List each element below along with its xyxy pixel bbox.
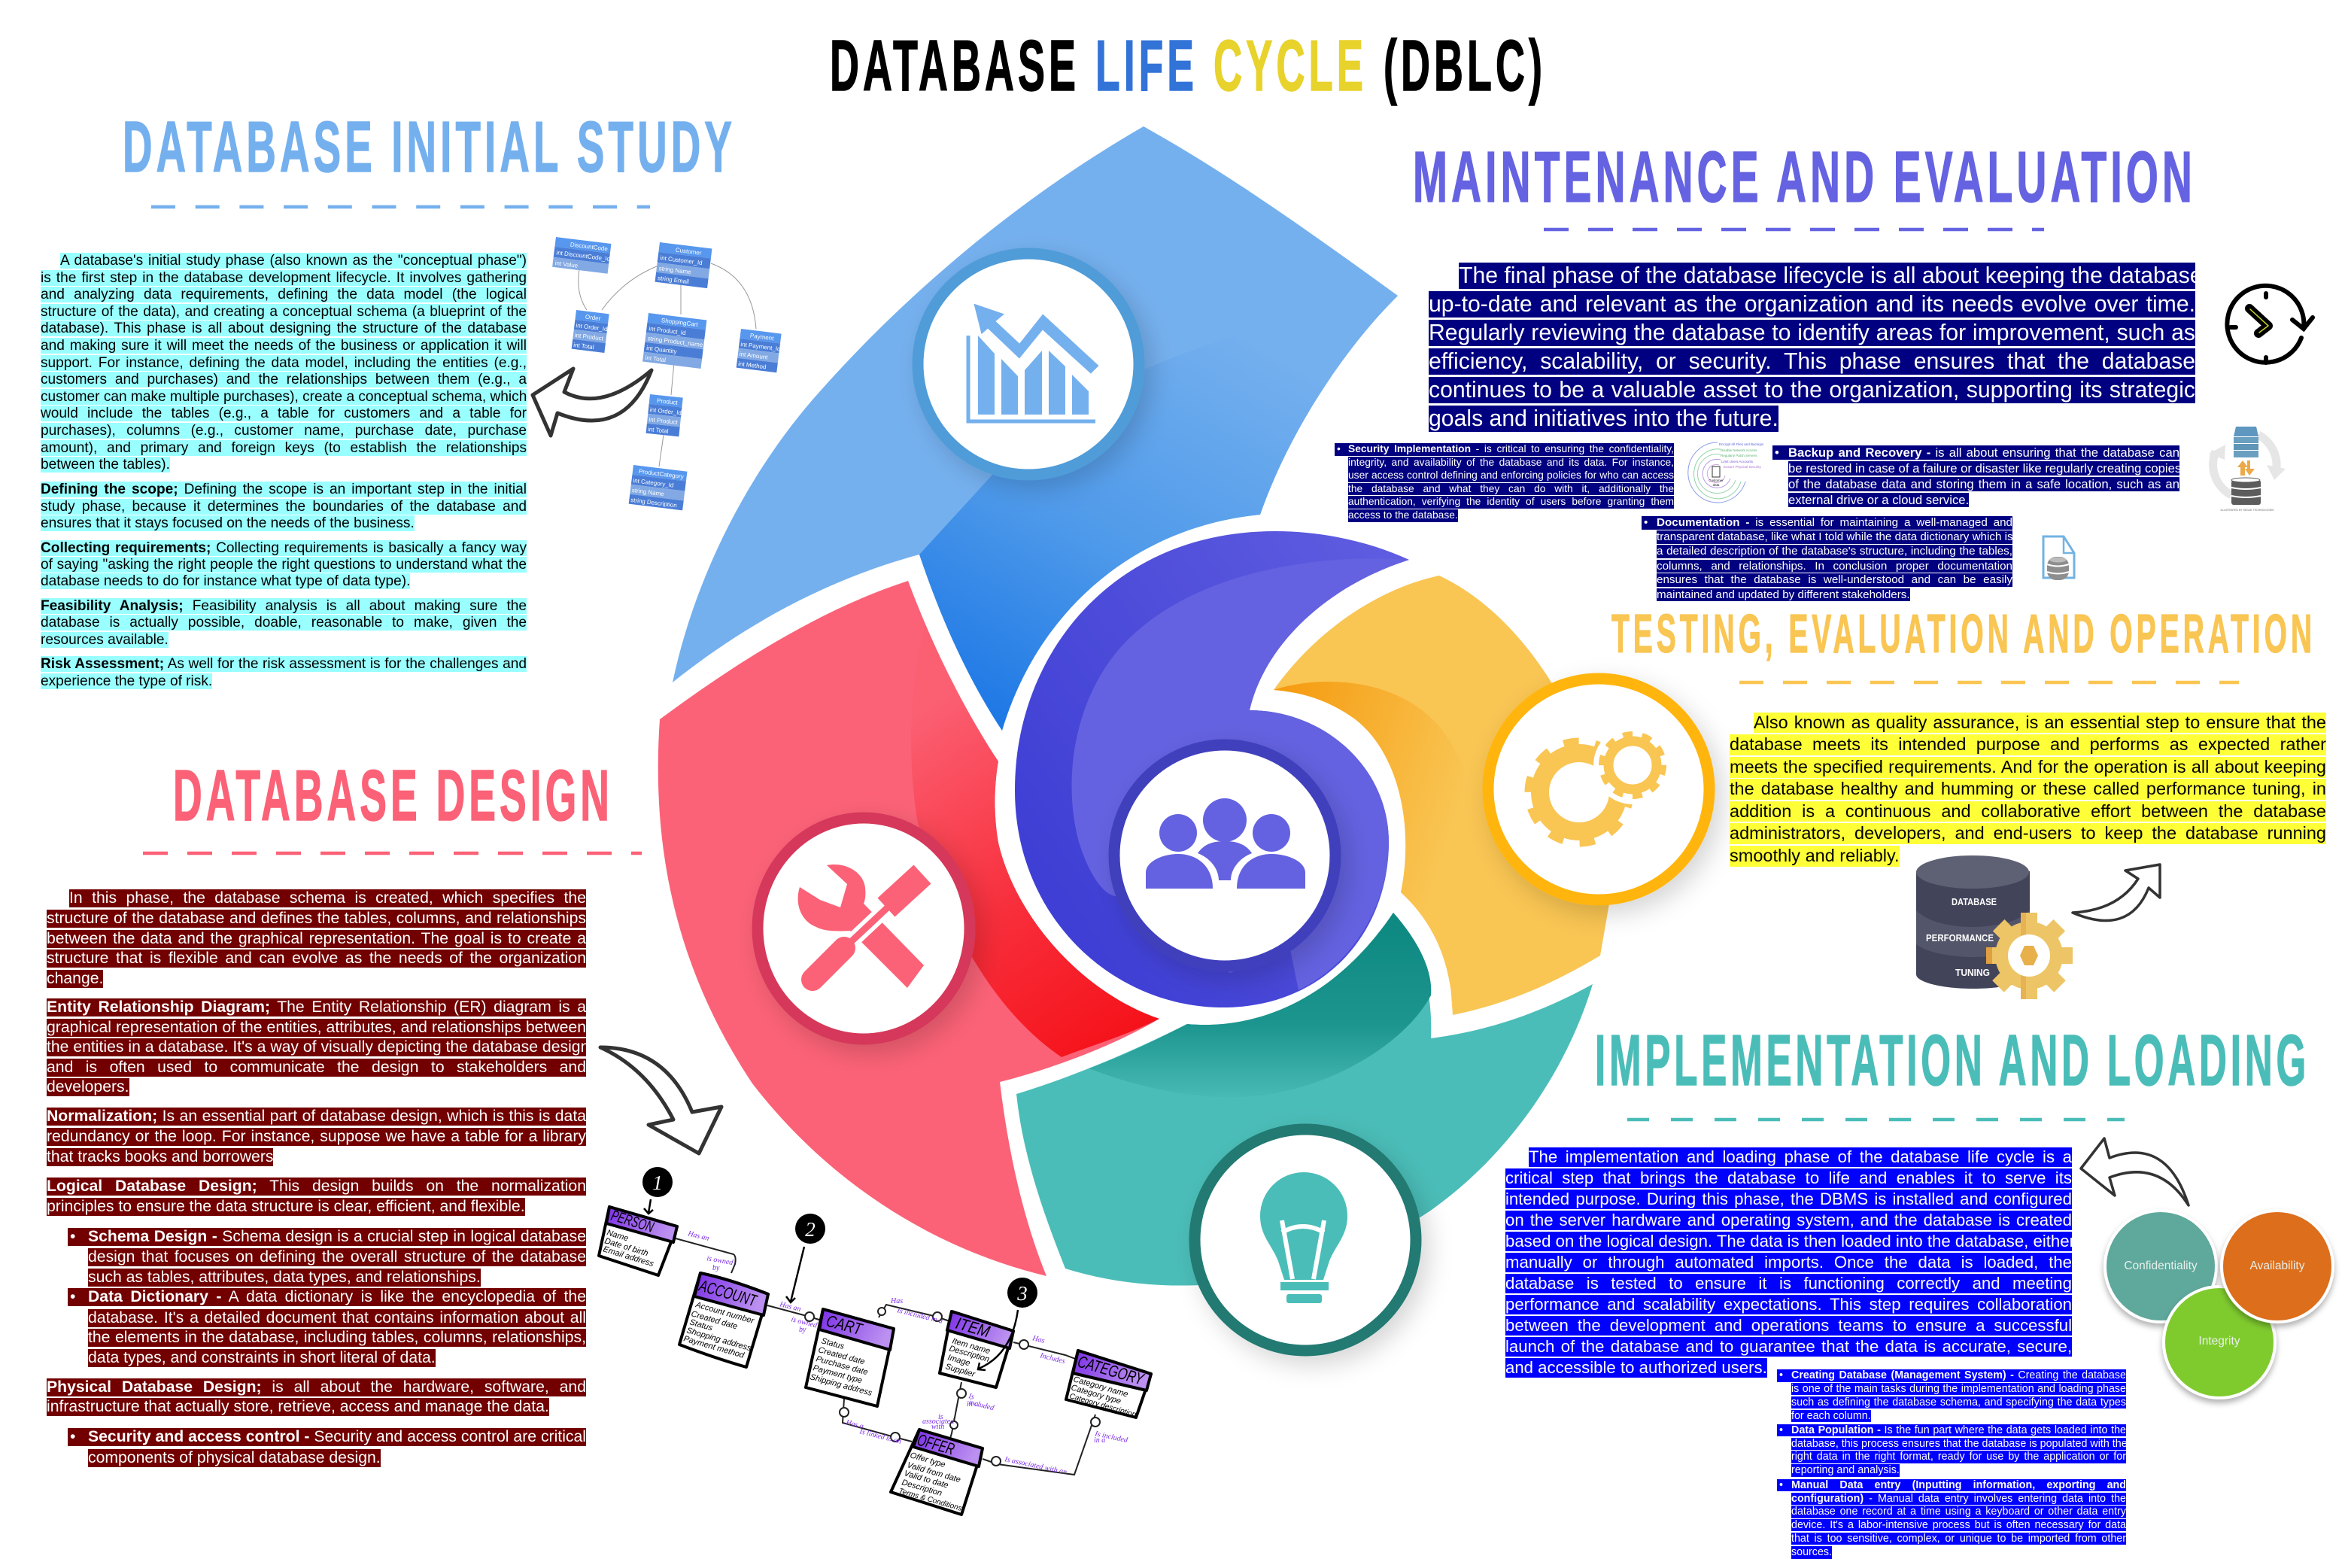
- text panel: implementation details list: configuration) - Manual data entry involves entering data into the: [1791, 1493, 2126, 1505]
- text panel: documentation: [1642, 516, 2013, 601]
- ER diagram: blue schema tables: int Product: [649, 416, 679, 426]
- ER diagram: hand drawn entities: Shipping address: [809, 1372, 873, 1398]
- CIA triad venn diagram: Availability: [2250, 1260, 2305, 1272]
- arrow: from design text to ER diagram: [600, 1047, 721, 1153]
- text panel: implementation and loading: intended purpose. During this phase, the DBMS is installed and configured: [1505, 1190, 2072, 1208]
- ER diagram: hand drawn entities: PERSON: [609, 1208, 656, 1236]
- text panel: security implementation: the database and what they can do with it, additionally the: [1348, 483, 1674, 494]
- text panel: backup and recovery: •: [1775, 445, 1779, 460]
- text panel: maintenance and evaluation: continues to be a valuable asset to the organization, supporting its strategic: [1429, 378, 2195, 402]
- ER diagram: blue schema tables: int Quantity: [646, 345, 677, 355]
- text panel: testing, evaluation and operation: meets the specified requirements. And for the operation is all about keeping: [1730, 757, 2326, 776]
- ER diagram: blue schema tables: int Category_Id: [633, 477, 674, 489]
- icon: database performance tuning: PERFORMANCE: [1926, 932, 1994, 944]
- ER diagram: hand drawn entities: Includes: [1038, 1351, 1066, 1366]
- text panel: implementation and loading: The implementation and loading phase of the database life cycle is a: [1529, 1147, 2072, 1166]
- text panel: database initial study: [41, 253, 527, 689]
- ER diagram: hand drawn entities: included: [967, 1398, 995, 1412]
- ER diagram: hand drawn entities: Supplier: [944, 1362, 977, 1379]
- text panel: database initial study: is the first step in the database development lifecycle. It involves gathering: [41, 270, 527, 286]
- text panel: implementation and loading: and accessible to authorized users.: [1505, 1358, 1767, 1377]
- icon: security spiral: Ensure Physical Security: [1724, 465, 1762, 469]
- ER diagram: hand drawn entities: in a: [1094, 1436, 1105, 1445]
- text panel: implementation details list: sources.: [1791, 1546, 1832, 1558]
- swirl segment: blue initial study: [673, 126, 1398, 731]
- text panel: testing, evaluation and operation: [1730, 712, 2326, 867]
- text panel: database design: [47, 889, 589, 1467]
- ER diagram: hand drawn entities: CATEGORY: [1076, 1352, 1147, 1389]
- ER diagram: blue schema tables: string Name: [631, 487, 665, 497]
- ER diagram: hand drawn entities: Is included: [1093, 1430, 1129, 1445]
- text panel: maintenance and evaluation: goals and initiatives into the future.: [1429, 406, 1778, 431]
- text panel: database initial study: Feasibility Analysis; Feasibility analysis is all about making sure the: [41, 597, 527, 614]
- text panel: testing, evaluation and operation: database meets its intended purpose and performs as expected rather: [1730, 734, 2326, 754]
- text panel: security implementation: authentication, verifying the identity of users before granting them: [1348, 496, 1674, 507]
- ER diagram: hand drawn entities: Has: [890, 1297, 903, 1305]
- ER diagram: hand drawn entities: Category type: [1070, 1383, 1122, 1406]
- ER diagram: hand drawn entities: Date of birth: [603, 1236, 649, 1258]
- text panel: implementation details list: •: [1779, 1369, 1783, 1381]
- text panel: database initial study: purchases), columns (e.g., customer name, purchase date, purchase: [41, 423, 527, 439]
- text panel: security implementation: user access control defining and enforcing policies for who can access: [1348, 469, 1674, 481]
- text panel: implementation and loading: based on the logical design. The data is then loaded into the database, either: [1505, 1232, 2075, 1250]
- icon: security spiral: Disable Network Access: [1721, 448, 1757, 452]
- text panel: implementation and loading: manually or through automated imports. Once the data is loaded, the: [1505, 1253, 2072, 1272]
- icon: backup and recovery: [2209, 427, 2286, 512]
- icon: security spiral: Regularly Patch Servers: [1721, 454, 1757, 457]
- ER diagram: blue schema tables: [552, 237, 782, 510]
- icon: security spiral: [1688, 442, 1764, 503]
- text panel: database design: that tracks books and borrowers: [47, 1148, 273, 1165]
- text panel: backup and recovery: be restored in case of a failure or disaster like regularly creating copies: [1788, 461, 2181, 476]
- CIA triad venn diagram: [2105, 1211, 2333, 1398]
- ER diagram: hand drawn entities: Account number: [694, 1300, 756, 1326]
- text panel: documentation: maintained and updated by different stakeholders.: [1657, 588, 1910, 601]
- text panel: implementation details list: database, this process ensures that the database is populated with the: [1791, 1438, 2128, 1450]
- ER diagram: hand drawn entities: by: [712, 1264, 720, 1272]
- ER diagram: blue schema tables: Customer: [675, 247, 702, 257]
- ER diagram: hand drawn entities: in a: [967, 1400, 978, 1408]
- text panel: database design: graphical representation of the entities, attributes, and relationships between: [47, 1019, 586, 1036]
- heading: database initial study: DATABASE INITIAL STUDY: [123, 107, 736, 187]
- ER diagram: blue schema tables: Order: [585, 314, 601, 322]
- ER diagram: blue schema tables: string Email: [658, 275, 689, 285]
- icon: clock: [2227, 286, 2313, 363]
- text panel: database design: •: [70, 1428, 75, 1445]
- ER diagram: hand drawn entities: Payment type: [812, 1363, 863, 1385]
- ER diagram: hand drawn entities: is owned: [790, 1315, 819, 1330]
- ER diagram: hand drawn entities: 1: [652, 1171, 663, 1194]
- ER diagram: hand drawn entities: Is: [967, 1392, 975, 1402]
- icon: security spiral: data: [1713, 483, 1720, 487]
- text panel: database initial study: support. For instance, defining the data model, including the entities (e.g.,: [41, 355, 527, 371]
- ER diagram: hand drawn entities: Status: [688, 1317, 714, 1333]
- text panel: database design: developers.: [47, 1078, 129, 1095]
- ER diagram: blue schema tables: Payment: [749, 333, 775, 342]
- text panel: database design: Entity Relationship Diagram; The Entity Relationship (ER) diagram is a: [47, 998, 586, 1016]
- text panel: database design: •: [70, 1228, 75, 1245]
- ER diagram: hand drawn entities: 2: [805, 1218, 816, 1241]
- ER diagram: hand drawn entities: Created date: [690, 1309, 739, 1331]
- text panel: implementation details list: device. It's a labor-intensive process but is often necessary for data: [1791, 1519, 2126, 1531]
- text panel: database design: Data Dictionary - A data dictionary is like the encyclopedia of the: [88, 1288, 586, 1305]
- text panel: database design: data types, and constraints in short literal of data.: [88, 1349, 436, 1366]
- ER diagram: hand drawn entities: Image: [946, 1353, 971, 1368]
- text panel: security implementation: integrity, and availability of the database and its data. For instance,: [1348, 457, 1674, 468]
- text panel: maintenance and evaluation: Regularly reviewing the database to identify areas for improvement, such as: [1429, 321, 2195, 345]
- text panel: implementation details list: such as defining the database schema, and specifying the data types: [1791, 1396, 2126, 1408]
- ER diagram: hand drawn entities: ITEM: [954, 1314, 992, 1342]
- text panel: testing, evaluation and operation: smoothly and reliably.: [1730, 846, 1900, 865]
- text panel: implementation and loading: [1505, 1147, 2075, 1378]
- swirl segment: yellow testing: [1274, 576, 1609, 1015]
- ER diagram: blue schema tables: int Total: [573, 342, 594, 351]
- ER diagram: hand drawn entities: Created date: [817, 1345, 866, 1366]
- text panel: implementation details list: that is too sensitive, complex, or unique to be imported from other: [1791, 1532, 2126, 1544]
- text panel: database design: structure that is flexible and can evolve as the needs of the organization: [47, 950, 586, 967]
- text panel: database design: •: [70, 1288, 75, 1305]
- CIA triad venn diagram: Confidentiality: [2124, 1260, 2198, 1272]
- text panel: implementation details list: reporting and analysis.: [1791, 1464, 1900, 1476]
- heading: database design: DATABASE DESIGN: [173, 755, 613, 836]
- text panel: database initial study: database). This phase is all about designing the structure of the database: [41, 321, 527, 336]
- text panel: database initial study: between the tables).: [41, 457, 170, 473]
- text panel: database design: Schema Design - Schema design is a crucial step in logical database: [88, 1228, 586, 1245]
- text panel: database design: In this phase, the database schema is created, which specifies the: [69, 889, 586, 907]
- arrow: from schema to initial study text: [533, 369, 652, 436]
- ER diagram: hand drawn entities: Has an: [778, 1300, 802, 1314]
- text panel: database design: Normalization; Is an essential part of database design, which is this is data: [47, 1108, 586, 1125]
- text panel: database design: structure of the database and defines the tables, columns, and relationships: [47, 910, 586, 927]
- text panel: database initial study: structure of the data), and creating a conceptual schema (a blueprint of the: [41, 304, 527, 320]
- ER diagram: hand drawn entities: Has an: [686, 1229, 710, 1243]
- text panel: database initial study: resources available.: [41, 632, 169, 647]
- text panel: documentation: transparent database, like what I told while the data dictionary which is: [1657, 530, 2013, 543]
- text panel: implementation and loading: performance and scalability expectations. This step requires collaboration: [1505, 1295, 2072, 1314]
- text panel: implementation and loading: critical step that brings the database to life and enables it to serve its: [1505, 1168, 2072, 1187]
- text panel: database initial study: experience the type of risk.: [41, 673, 212, 689]
- ER diagram: blue schema tables: int Order_Id: [649, 406, 682, 416]
- icon: documentation file: [2043, 536, 2074, 580]
- text panel: testing, evaluation and operation: administrators, developers, and end-users to keep the database running: [1730, 823, 2326, 843]
- arrow: CIA triad to implementation text: [2081, 1138, 2189, 1205]
- text panel: documentation: a detailed description of the database's structure, including the tables,: [1657, 545, 2012, 558]
- ER diagram: hand drawn entities: Has: [1031, 1334, 1046, 1345]
- ER diagram: blue schema tables: string Name: [658, 265, 692, 275]
- ER diagram: hand drawn entities: Is linked to an: [858, 1427, 902, 1446]
- text panel: implementation and loading: on the server hardware and operating system, and the database is created: [1505, 1211, 2072, 1229]
- text panel: implementation details list: •: [1779, 1479, 1783, 1491]
- text panel: database initial study: database needs to do for instance what type of data type).: [41, 573, 410, 589]
- text panel: implementation and loading: between the development and operations teams to ensure a successful: [1505, 1316, 2072, 1335]
- text panel: database initial study: study phase, because it determines the boundaries of the database and: [41, 499, 527, 515]
- text panel: database initial study: would include the tables (e.g., a table for customers and a table for: [41, 406, 527, 421]
- text panel: implementation details list: Manual Data entry (Inputting information, exporting and: [1791, 1479, 2126, 1491]
- text panel: database initial study: database is actually possible, doable, reasonable to make, given the: [41, 615, 527, 631]
- ER diagram: hand drawn entities: is owned: [706, 1254, 734, 1267]
- ER diagram: hand drawn entities: Is associated with an: [1003, 1455, 1068, 1476]
- icon: security spiral: Customer: [1709, 479, 1724, 482]
- ER diagram: hand drawn entities: Purchase date: [815, 1354, 869, 1377]
- ER diagram: hand drawn entities: Status: [820, 1336, 846, 1351]
- ER diagram: hand drawn entities: Shopping address: [685, 1326, 752, 1353]
- text panel: implementation details list: [1777, 1369, 2128, 1559]
- text panel: database design: Physical Database Design; is all about the hardware, software, and: [47, 1378, 586, 1396]
- text panel: backup and recovery: Backup and Recovery - is all about ensuring that the database can: [1788, 445, 2179, 460]
- ER diagram: blue schema tables: int Customer_Id: [660, 254, 703, 266]
- text panel: database design: redundancy or the loop. For instance, suppose we have a table for a library: [47, 1128, 586, 1145]
- text panel: database initial study: Risk Assessment; As well for the risk assessment is for the challenges and: [41, 656, 527, 672]
- swirl segment: red database design: [658, 581, 1159, 1276]
- text panel: backup and recovery: of the database data and storing them in a safe location, such as an: [1788, 477, 2179, 491]
- ER diagram: blue schema tables: int DiscountCode_Id: [556, 249, 611, 263]
- text panel: testing, evaluation and operation: Also known as quality assurance, is an essential step to ensure that the: [1754, 712, 2326, 731]
- icon circle: light bulb: [1195, 1129, 1416, 1351]
- ER diagram: hand drawn entities: with: [931, 1423, 944, 1431]
- ER diagram: hand drawn entities: Payment method: [682, 1334, 746, 1360]
- text panel: database initial study: and analyzing data requirements, defining the data model (the logical: [41, 287, 527, 302]
- text panel: documentation: ensures that the database is well-understood and can be easily: [1657, 573, 2012, 586]
- text panel: database initial study: ensures that it stays focused on the needs of the business.: [41, 515, 415, 531]
- text panel: testing, evaluation and operation: addition is a continuous and collaborative effort between the database: [1730, 801, 2326, 820]
- ER diagram: blue schema tables: DiscountCode: [570, 241, 609, 253]
- text panel: implementation details list: for each column.: [1791, 1410, 1871, 1422]
- text panel: database initial study: Collecting requirements; Collecting requirements is basically a fancy way: [41, 540, 527, 556]
- text panel: maintenance and evaluation: The final phase of the database lifecycle is all about keeping the database: [1459, 263, 2202, 288]
- text panel: database design: the entities in a database. It's a way of visually depicting the database design: [47, 1038, 589, 1056]
- ER diagram: hand drawn entities: Terms & Conditions: [898, 1487, 963, 1513]
- icon: security spiral: Limit Users Accounts: [1721, 460, 1754, 463]
- text panel: database design: between the data and the graphical representation. The goal is to create a: [47, 930, 586, 947]
- ER diagram: hand drawn entities: by: [799, 1326, 806, 1334]
- ER diagram: hand drawn entities: [599, 1167, 1151, 1515]
- title: (DBLC): [1384, 26, 1546, 106]
- icon: database performance tuning: [1916, 855, 2073, 999]
- text panel: database initial study: of saying "asking the right people the right questions to understand what the: [41, 557, 527, 573]
- text panel: database initial study: and making sure it will meet the needs of the business or application it will: [41, 338, 527, 354]
- ER diagram: hand drawn entities: associated: [922, 1418, 955, 1426]
- ER diagram: hand drawn entities: Valid to date: [903, 1469, 949, 1491]
- ER diagram: blue schema tables: int Product_Id: [649, 325, 686, 336]
- text panel: maintenance and evaluation: [1429, 263, 2202, 432]
- ER diagram: blue schema tables: ProductCategory: [638, 468, 684, 480]
- ER diagram: hand drawn entities: Category name: [1072, 1375, 1129, 1399]
- text panel: security implementation: [1335, 443, 1674, 522]
- ER diagram: hand drawn entities: 3: [1016, 1282, 1028, 1305]
- icon circle: chart: [918, 254, 1139, 475]
- text panel: implementation details list: •: [1779, 1424, 1783, 1436]
- ER diagram: hand drawn entities: is: [938, 1413, 943, 1421]
- text panel: database design: database. It's a detailed document that contains information about all: [88, 1309, 586, 1326]
- text panel: database design: and is often used to communicate the design to stakeholders and: [47, 1059, 586, 1076]
- ER diagram: blue schema tables: int Product: [574, 332, 604, 342]
- text panel: security implementation: access to the database.: [1348, 509, 1458, 521]
- text panel: backup and recovery: [1772, 445, 2181, 507]
- title: LIFE: [1095, 26, 1198, 106]
- text panel: database initial study: customers and purchases) and the relationships between them (e.g., a: [41, 372, 527, 387]
- icon circle: tools: [758, 818, 970, 1039]
- title: [830, 26, 1546, 106]
- ER diagram: hand drawn entities: Is included in a: [895, 1306, 943, 1326]
- ER diagram: hand drawn entities: Description: [901, 1478, 943, 1498]
- text panel: database initial study: A database's initial study phase (also known as the "conceptual phase"): [60, 253, 527, 269]
- text panel: implementation details list: Data Population - Is the fun part where the data gets loaded into the: [1791, 1424, 2126, 1436]
- ER diagram: blue schema tables: int Value: [554, 260, 579, 269]
- text panel: testing, evaluation and operation: the database healthy and humming or these called performance tuning, in: [1730, 779, 2326, 798]
- swirl segment: teal implementation: [1016, 913, 1593, 1286]
- text panel: documentation: •: [1644, 516, 1648, 529]
- ER diagram: hand drawn entities: CART: [825, 1311, 865, 1339]
- ER diagram: blue schema tables: Product: [657, 397, 679, 406]
- ER diagram: hand drawn entities: Name: [606, 1228, 630, 1243]
- icon: security spiral: Encrypt All Files and Backups: [1719, 442, 1764, 446]
- text panel: database design: principles to ensure the data structure is clear, efficient, and flexible.: [47, 1198, 525, 1215]
- ER diagram: hand drawn entities: Offer type: [909, 1451, 946, 1469]
- text panel: implementation details list: Creating Database (Management System) - Creating the database: [1791, 1369, 2126, 1381]
- ER diagram: hand drawn entities: Email address: [602, 1244, 655, 1269]
- text panel: implementation and loading: launch of the database and to guarantee that the data is accurate, secure,: [1505, 1337, 2072, 1356]
- ER diagram: blue schema tables: int Order_Id: [576, 322, 608, 333]
- ER diagram: hand drawn entities: Description: [948, 1344, 990, 1364]
- icon: backup and recovery: ILLUSTRATED BY SEGUE TECHNOLOGIES: [2221, 509, 2274, 512]
- arrow: performance tuning: [2073, 865, 2160, 921]
- text panel: database initial study: Defining the scope; Defining the scope is an important step in the initial: [41, 482, 527, 497]
- text panel: implementation details list: is one of the main tasks during the implementation and loading phase: [1791, 1383, 2126, 1395]
- text panel: database design: Security and access control - Security and access control are critical: [88, 1428, 586, 1445]
- icon: database performance tuning: TUNING: [1955, 967, 1990, 978]
- text panel: backup and recovery: external drive or a cloud service.: [1788, 493, 1969, 507]
- ER diagram: blue schema tables: string Description: [630, 497, 677, 509]
- ER diagram: hand drawn entities: ACCOUNT: [696, 1275, 760, 1311]
- text panel: implementation details list: database one record at a time using a keyboard or other data entry: [1791, 1506, 2126, 1518]
- CIA triad venn diagram: Integrity: [2198, 1335, 2240, 1348]
- ER diagram: blue schema tables: ShoppingCart: [661, 317, 699, 328]
- text panel: database design: Logical Database Design; This design builds on the normalization: [47, 1178, 586, 1195]
- ER diagram: blue schema tables: int Total: [645, 354, 667, 363]
- icon circle: gears: [1488, 679, 1709, 900]
- ER diagram: hand drawn entities: OFFER: [916, 1430, 957, 1459]
- text panel: database design: the elements in the database, including tables, columns, relationships,: [88, 1329, 586, 1346]
- text panel: database design: change.: [47, 970, 103, 987]
- text panel: maintenance and evaluation: up-to-date and relevant as the organization and its needs evolve over time.: [1429, 292, 2195, 317]
- text panel: database initial study: customer can make multiple purchases), create a conceptual schema, which: [41, 389, 527, 405]
- text panel: security implementation: Security Implementation - is critical to ensuring the confidentiality,: [1348, 443, 1674, 454]
- text panel: database initial study: amount), and primary and foreign keys (to establish the relationships: [41, 440, 527, 456]
- text panel: database design: components of physical database design.: [88, 1449, 381, 1466]
- ER diagram: blue schema tables: int Payment_Id: [740, 341, 781, 353]
- ER diagram: hand drawn entities: Item name: [951, 1336, 991, 1356]
- text panel: maintenance and evaluation: efficiency, scalability, or security. This phase ensures that the database: [1429, 349, 2195, 374]
- text panel: implementation details list: right data in the right format, ready for use by the application or for: [1791, 1451, 2126, 1463]
- text panel: security implementation: •: [1337, 443, 1341, 454]
- ER diagram: blue schema tables: int Method: [738, 360, 767, 370]
- title: CYCLE: [1213, 26, 1367, 106]
- ER diagram: hand drawn entities: Category description: [1068, 1392, 1138, 1419]
- ER diagram: blue schema tables: string Product_name: [647, 335, 703, 348]
- ER diagram: blue schema tables: int Amount: [739, 351, 769, 361]
- text panel: documentation: Documentation - is essential for maintaining a well-managed and: [1657, 516, 2012, 529]
- ER diagram: hand drawn entities: Has a: [844, 1418, 864, 1431]
- ER diagram: blue schema tables: int Total: [648, 426, 669, 435]
- ER diagram: hand drawn entities: Valid from date: [906, 1460, 961, 1484]
- text panel: database design: infrastructure that actually store, retrieve, access and manage the data.: [47, 1398, 549, 1415]
- text panel: database design: such as tables, attributes, data types, and relationships.: [88, 1269, 481, 1286]
- title: DATABASE: [830, 26, 1080, 106]
- text panel: database design: design that focuses on defining the overall structure of the database: [88, 1248, 586, 1266]
- text panel: implementation and loading: database is tested to ensure it is functioning correctly and meeting: [1505, 1274, 2072, 1293]
- icon: database performance tuning: DATABASE: [1952, 896, 1997, 907]
- swirl segment: purple maintenance: [1015, 531, 1409, 1007]
- text panel: documentation: columns, and relationships. In conclusion proper documentation: [1657, 560, 2012, 573]
- icon circle: people: [1114, 745, 1335, 966]
